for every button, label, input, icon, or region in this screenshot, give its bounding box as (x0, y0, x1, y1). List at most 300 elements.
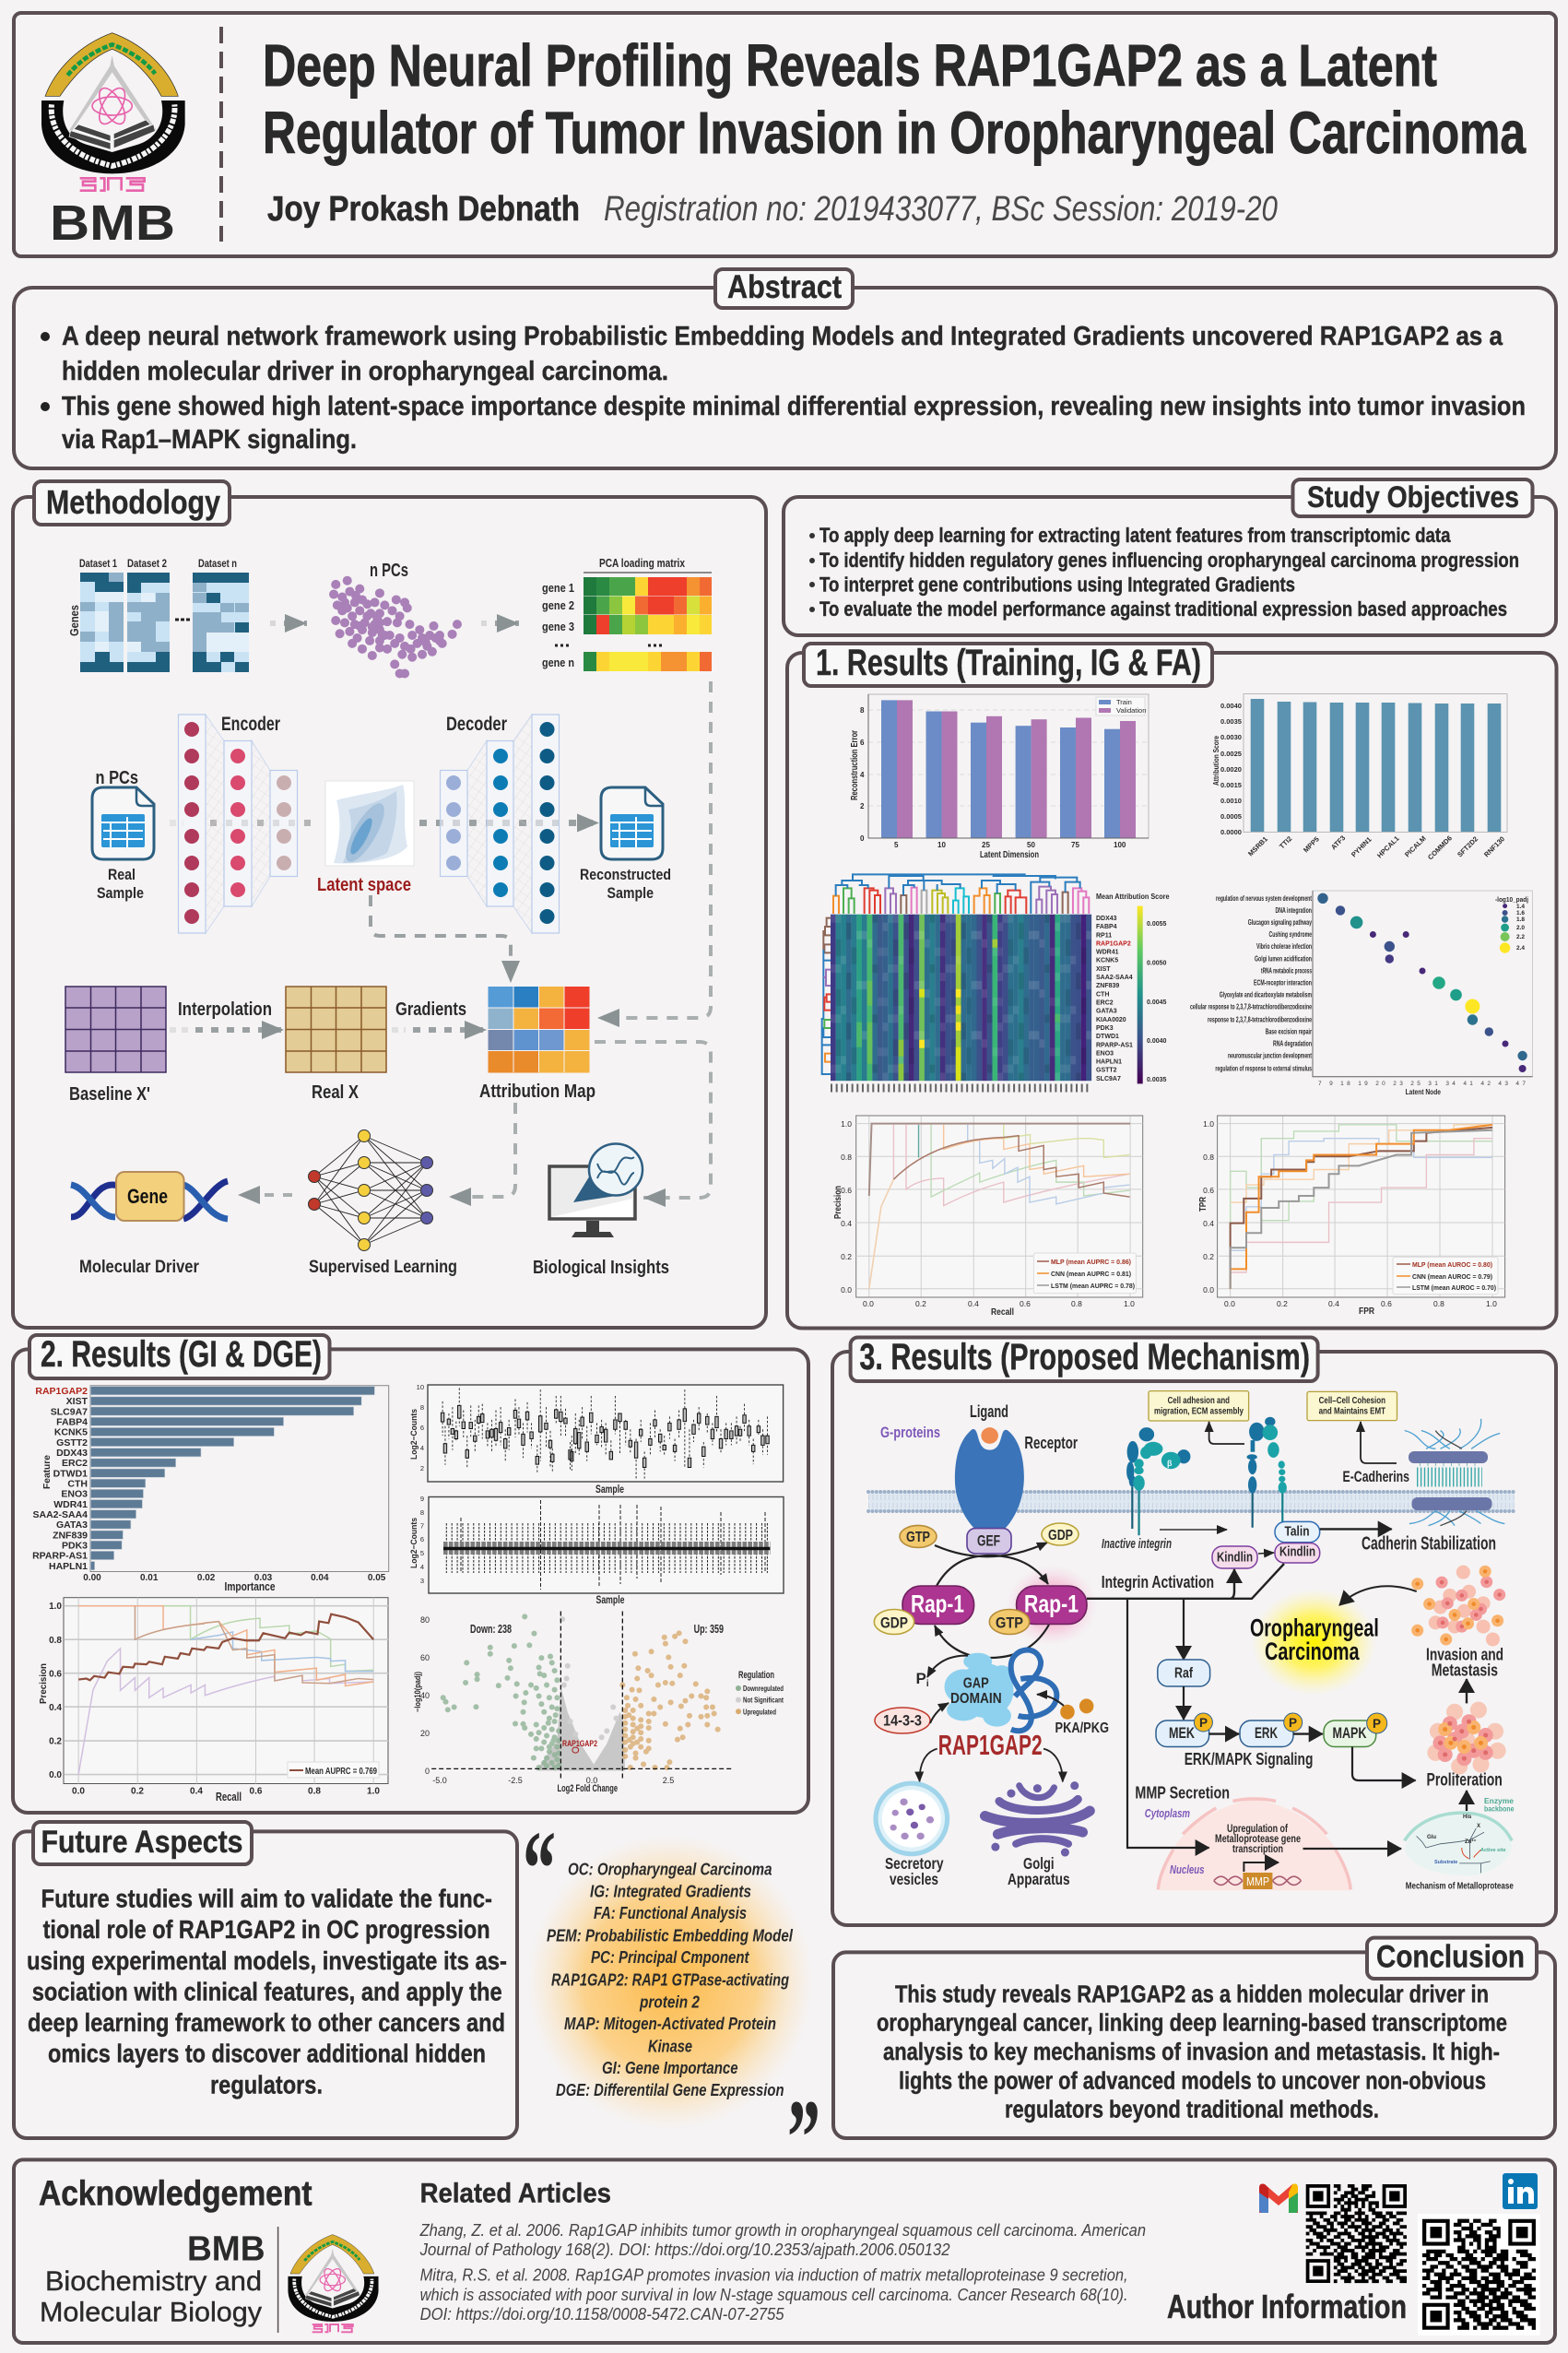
chart: reconstruction error bars: 6 (860, 739, 865, 747)
chart: enrichment dot plot: Golgi lumen acidification (1255, 955, 1312, 963)
icon: reconstructed sample document: Reconstructed (580, 866, 671, 883)
chart: reconstruction error bars: 100 (1114, 841, 1126, 849)
QR code: gmail (1306, 2184, 1407, 2283)
arrow: integrin activation step (1160, 1529, 1227, 1531)
arrow: loading matrix to attribution map (597, 681, 711, 1018)
text: objectives list: To interpret gene contributions using Integrated Gradients (819, 573, 1295, 597)
chart: clustered heatmap: RAP1GAP2 (1096, 940, 1131, 947)
chart: reconstruction error bars: 0 (860, 834, 865, 843)
heatmap: PCA loading matrix: gene 1 (542, 581, 574, 595)
icon: mechanism of metalloprotease: Substrate (1434, 1860, 1457, 1865)
icon: inactive integrin (1102, 1427, 1190, 1552)
chart: gene importance bars: ENO3 (61, 1489, 88, 1500)
chart: volcano plot: −log10(padj) (413, 1672, 422, 1712)
legend: PR models: CNN (mean AUPRC = 0.81) (1051, 1270, 1132, 1278)
icon: receptor with ligand and GEF: Receptor (1024, 1434, 1078, 1452)
diagram: ERK/MAPK signaling: Raf (1174, 1666, 1194, 1682)
chart: clustered heatmap: Mean Attribution Score (1096, 893, 1170, 901)
chart: enrichment dot plot (1190, 891, 1532, 1096)
icon: gene on DNA: Gene (127, 1185, 168, 1208)
chart: mean precision recall: Precision (38, 1663, 49, 1704)
chart: boxplot normalized counts: 3 (420, 1577, 424, 1585)
chart: mean precision recall: 0.0 (49, 1770, 62, 1780)
heatmap: PCA loading matrix: PCA loading matrix (599, 557, 685, 570)
text: abbreviations (547, 1860, 794, 2099)
icon: RAP1GAP2 GAP domain: 14-3-3 (883, 1713, 922, 1730)
author line: Joy Prokash Debnath (267, 190, 580, 229)
text: abstract bullets (41, 322, 1526, 455)
component: Talin and Kindlin: Kindlin (1217, 1549, 1253, 1565)
chart: ROC curves: 0.0 (1203, 1285, 1214, 1295)
panel: results 3 proposed mechanism (832, 1337, 1556, 1925)
chart: ROC curves: 1.0 (1203, 1119, 1214, 1129)
chart: clustered heatmap: SLC9A7 (1096, 1076, 1121, 1082)
diagram: Rap-1 GTP/GDP cycle: Rap-1 (1024, 1590, 1079, 1617)
icon: gmail (1259, 2183, 1298, 2213)
arrow: metastasis to carcinoma (1339, 1586, 1417, 1605)
icon: secretory vesicles: vesicles (890, 1870, 938, 1888)
heatmap: PCA loading matrix (542, 557, 712, 671)
legend: ROC models (1393, 1257, 1498, 1295)
chart: gene importance bars: 0.02 (197, 1573, 216, 1583)
heatmap: datasets (67, 557, 249, 672)
chart: boxplot raw counts: Log2−Counts (409, 1409, 419, 1460)
chart: clustered heatmap: KIAA0020 (1096, 1017, 1126, 1023)
text: future aspects body (27, 1885, 507, 2099)
chart: mean precision recall: 1.0 (367, 1787, 380, 1796)
panel: abstract (14, 269, 1556, 468)
icon: mechanism of metalloprotease (1405, 1796, 1515, 1892)
icon: invasion and metastasis cells: Invasion and (1426, 1645, 1503, 1664)
chart: attribution score bars: COMMD6 (1426, 834, 1454, 861)
chart: enrichment dot plot: 1.4 (1516, 904, 1525, 910)
chart: clustered heatmap: ERC2 (1096, 999, 1114, 1007)
legend: PR models: MLP (mean AUPRC = 0.86) (1051, 1258, 1132, 1266)
callout: oropharyngeal carcinoma: Carcinoma (1265, 1638, 1360, 1665)
diagram: autoencoder (170, 714, 599, 933)
chart: boxplot raw counts: 10 (417, 1383, 424, 1391)
text: related articles: DOI: https://doi.org/10.1158/0008-5472.CAN-07-2755 (420, 2305, 785, 2323)
chart: mean precision recall: 0.6 (250, 1787, 263, 1796)
icon: Golgi apparatus: Apparatus (1008, 1870, 1070, 1888)
heatmap: datasets: Dataset n (198, 557, 237, 570)
chart: gene importance bars: CTH (67, 1479, 88, 1490)
text: department name: Molecular Biology (40, 2298, 262, 2328)
chart: boxplot normalized counts: 9 (420, 1495, 424, 1503)
heatmap: attribution map (479, 987, 595, 1102)
legend: mean AUPRC: Mean AUPRC = 0.769 (305, 1766, 377, 1777)
panel: header (14, 13, 1556, 256)
chart: gene importance bars: KCNK5 (54, 1427, 88, 1438)
chart: clustered heatmap: 0.0050 (1147, 961, 1167, 967)
chart: reconstruction error bars: 5 (894, 841, 899, 849)
chart: volcano plot (413, 1612, 784, 1794)
text: objectives list (809, 524, 1519, 621)
chart: gene importance bars: 0.03 (254, 1573, 273, 1583)
chart: ROC curves: 0.0 (1224, 1299, 1235, 1308)
heading: results 2 (29, 1334, 330, 1378)
chart: precision recall curves: 0.4 (968, 1299, 979, 1308)
chart: boxplot raw counts: 6 (420, 1424, 424, 1432)
arrow: supervised learning to gene (238, 1193, 292, 1197)
icon: real sample document (92, 768, 154, 902)
text: future aspects body: using experimental models, investigate its as- (27, 1946, 507, 1975)
membrane (868, 1491, 1515, 1512)
icon: reconstructed sample document (580, 787, 671, 902)
chart: enrichment dot plot: regulation of response to external stimulus (1215, 1064, 1312, 1073)
chart: gene importance bars: XIST (66, 1396, 88, 1407)
arrow: datasets to PCs (270, 621, 307, 626)
heading: results 3: 3. Results (Proposed Mechanism) (859, 1337, 1310, 1378)
heatmap: datasets: Genes (67, 605, 81, 636)
chart: precision recall curves: 0.6 (1020, 1299, 1031, 1308)
text: cadherin stabilization: Cadherin Stabilization (1362, 1534, 1496, 1555)
chart: boxplot raw counts: Sample (595, 1483, 624, 1496)
legend: PR models (1033, 1253, 1136, 1294)
text: abbreviations: PEM: Probabilistic Embedding Model (547, 1925, 794, 1945)
chart: gene importance bars: 0.01 (140, 1573, 159, 1583)
chart: ROC curves: 0.6 (1203, 1186, 1214, 1195)
chart: gene importance bars: ERC2 (62, 1458, 88, 1469)
text: abstract bullets: hidden molecular driver in oropharyngeal carcinoma. (62, 357, 668, 386)
icon: real sample document: Real (108, 866, 136, 883)
callout: oropharyngeal carcinoma (1250, 1589, 1379, 1696)
chart: boxplot normalized counts: 8 (420, 1508, 424, 1517)
text: conclusion body: regulators beyond traditional methods. (1005, 2098, 1379, 2123)
arrow: gradients (392, 999, 487, 1030)
chart: mean precision recall: 0.4 (190, 1787, 203, 1796)
diagram: autoencoder: Decoder (446, 714, 507, 735)
chart: mean precision recall: 0.0 (72, 1787, 85, 1796)
chart: clustered heatmap: DTWD1 (1096, 1034, 1119, 1040)
chart: enrichment dot plot: neuromuscular junction development (1228, 1051, 1312, 1060)
chart: precision recall curves: 1.0 (841, 1119, 852, 1129)
panel: acknowledgement and references (14, 2159, 1555, 2343)
icon: receptor with ligand and GEF (880, 1402, 1078, 1554)
chart: mean precision recall: 0.2 (131, 1787, 144, 1796)
chart: gene importance bars: DDX43 (56, 1448, 88, 1459)
icon: receptor with ligand and GEF: GEF (977, 1532, 1000, 1549)
chart: attribution score bars: 0.0040 (1220, 702, 1242, 710)
chart: mean precision recall: 0.6 (49, 1669, 62, 1680)
icon: mechanism of metalloprotease: X (1477, 1824, 1480, 1829)
chart: boxplot normalized counts: 4 (420, 1563, 424, 1571)
chart: reconstruction error bars: 75 (1071, 841, 1079, 849)
arrow: Rap-1 integrin activation pathway: Integrin Activation (1102, 1573, 1214, 1591)
chart: ROC curves: 0.4 (1203, 1219, 1214, 1228)
text: abbreviations: RAP1GAP2: RAP1 GTPase-activating (551, 1969, 789, 1989)
icon: RAP1GAP2 GAP domain: GAP (963, 1676, 989, 1692)
icon: real sample document: n PCs (96, 768, 138, 788)
heading: conclusion: Conclusion (1376, 1940, 1525, 1975)
icon: RAP1GAP2 GAP domain: i (926, 1679, 929, 1689)
legend: ROC models: CNN (mean AUROC = 0.79) (1412, 1272, 1493, 1281)
chart: latent space density: Latent space (317, 875, 411, 895)
diagram: MMP secretion nucleus (1135, 1783, 1350, 1890)
text: abbreviations: MAP: Mitogen-Activated Protein (564, 2014, 776, 2033)
chart: attribution score bars: 0.0005 (1220, 812, 1242, 821)
chart: volcano plot: RAP1GAP2 (562, 1739, 597, 1749)
heading: future aspects: Future Aspects (41, 1825, 243, 1860)
chart: ROC curves: 0.6 (1381, 1299, 1392, 1308)
component: Talin and Kindlin: Talin (1285, 1524, 1309, 1540)
text: department name (40, 2229, 265, 2328)
icon: invasion and metastasis cells (1418, 1571, 1503, 1680)
chart: attribution score bars: 0.0010 (1220, 797, 1242, 805)
legend: regulation: Regulation (738, 1670, 774, 1681)
text: abstract bullets: via Rap1–MAPK signaling. (62, 425, 357, 455)
text: related articles (419, 2178, 1146, 2323)
chart: enrichment dot plot: Glyoxylate and dicarboxylate metabolism (1220, 990, 1312, 999)
text: department name: Biochemistry and (45, 2266, 262, 2297)
icon: active integrin (1246, 1417, 1287, 1528)
icon: receptor with ligand and GEF: Ligand (970, 1402, 1008, 1421)
chart: boxplot raw counts: 2 (420, 1464, 424, 1472)
chart: attribution score bars: 0.0020 (1220, 765, 1242, 774)
icon: E-cadherins: E-Cadherins (1342, 1468, 1409, 1485)
chart: enrichment dot plot: response to 2,3,7,8-tetrachlorodibenzodioxine (1208, 1016, 1312, 1023)
panel: results 1 (787, 643, 1556, 1328)
chart: clustered heatmap: RPARP-AS1 (1096, 1042, 1133, 1048)
chart: mean precision recall: 1.0 (49, 1602, 62, 1612)
text: future aspects body: sociation with clinical features, and apply the (32, 1977, 502, 2006)
chart: gene importance bars (32, 1386, 389, 1593)
text: abbreviations: FA: Functional Analysis (594, 1903, 747, 1922)
chart: mean precision recall: 0.8 (308, 1787, 321, 1796)
chart: clustered heatmap: 0.0045 (1147, 999, 1167, 1006)
callout: cell-cell cohesion: and Maintains EMT (1319, 1406, 1385, 1417)
chart: enrichment dot plot: Cushing syndrome (1268, 930, 1312, 939)
chart: volcano plot: 60 (420, 1653, 430, 1662)
chart: gene importance bars: 0.00 (83, 1573, 101, 1583)
chart: attribution score bars: ATF3 (1329, 834, 1347, 851)
chart: gene importance bars: SAA2-SAA4 (32, 1509, 88, 1520)
chart: enrichment dot plot: cellular response to 2,3,7,8-tetrachlorodibenzodioxine (1190, 1003, 1312, 1011)
diagram: ERK/MAPK signaling (1156, 1660, 1387, 1768)
text: abbreviations: GI: Gene Importance (602, 2058, 738, 2077)
chart: volcano plot: 80 (420, 1615, 430, 1625)
chart: gene importance bars: GATA3 (56, 1519, 88, 1531)
chart: attribution score bars: 0.0025 (1220, 750, 1242, 758)
arrow: latent space to attribution map (371, 895, 511, 983)
chart: mean precision recall (38, 1598, 388, 1803)
icon: mechanism of metalloprotease: Active site (1480, 1848, 1506, 1853)
chart: attribution score bars: PYHIN1 (1350, 835, 1373, 858)
text: conclusion body: lights the power of advanced models to uncover non-obvious (899, 2068, 1486, 2094)
icon: RAP1GAP2 GAP domain (875, 1650, 1109, 1781)
arrow: interpolation: Interpolation (178, 999, 272, 1020)
text: abbreviations: DGE: Differentilal Gene Expression (556, 2080, 784, 2099)
chart: reconstruction error bars: 25 (982, 841, 990, 849)
chart: boxplot raw counts: 8 (420, 1403, 424, 1412)
text: BMB: BMB (50, 195, 175, 251)
chart: reconstruction error bars: Validation (1116, 706, 1146, 715)
chart: reconstruction error bars: 4 (860, 771, 865, 779)
diagram: Rap-1 GTP/GDP cycle: GTP (906, 1530, 930, 1545)
chart: mean precision recall: 0.2 (49, 1737, 62, 1746)
chart: clustered heatmap: 0.0035 (1147, 1077, 1167, 1083)
icon: secretory vesicles: Secretory (885, 1854, 944, 1873)
panel: study objectives (784, 479, 1556, 635)
chart: attribution score bars: SFT2D2 (1456, 834, 1480, 858)
text: future aspects body: deep learning framework to other cancers and (28, 2008, 505, 2037)
chart: precision recall curves: Precision (833, 1186, 843, 1219)
chart: clustered heatmap: WDR41 (1096, 950, 1119, 956)
text: abbreviations: protein 2 (639, 1992, 701, 2011)
chart: boxplot normalized counts: 6 (420, 1535, 424, 1543)
icon: biological insights monitor: Biological Insights (533, 1258, 669, 1278)
icon: proliferation cell cluster (1435, 1710, 1498, 1767)
chart: clustered heatmap: SAA2-SAA4 (1096, 975, 1133, 981)
text: future aspects body: Future studies will aim to validate the func- (41, 1885, 492, 1913)
chart: gene importance bars: SLC9A7 (51, 1406, 88, 1417)
chart: volcano plot: Log2 Fold Change (557, 1783, 618, 1794)
chart: attribution score bars: 0.0030 (1220, 733, 1242, 741)
heading: methodology: Methodology (46, 483, 220, 521)
chart: boxplot normalized counts: 7 (420, 1521, 424, 1531)
chart: mean precision recall: 0.8 (49, 1636, 62, 1646)
chart: volcano plot: -5.0 (432, 1776, 447, 1785)
icon: inactive integrin: Inactive integrin (1102, 1537, 1172, 1552)
chart: enrichment dot plot: Glucagon signaling pathway (1248, 918, 1312, 927)
chart: enrichment dot plot: RNA degradation (1273, 1040, 1312, 1047)
diagram: Rap-1 GTP/GDP cycle (874, 1523, 1098, 1658)
legend: PR models: LSTM (mean AUPRC = 0.78) (1051, 1282, 1136, 1290)
heatmap: attribution map: Attribution Map (479, 1082, 595, 1102)
chart: reconstruction error bars: 8 (860, 706, 865, 715)
chart: volcano plot: 20 (420, 1729, 430, 1738)
text: future aspects body: regulators. (210, 2070, 323, 2099)
heatmap: PCA loading matrix: gene 2 (542, 598, 574, 612)
chart: volcano plot: -2.5 (508, 1776, 523, 1785)
icon: mechanism of metalloprotease: Mechanism of Metalloprotease (1406, 1881, 1514, 1892)
arrow: autoencoder flow (170, 820, 184, 826)
icon: closing quote: ” (787, 2077, 820, 2198)
text: conclusion body: This study reveals RAP1GAP2 as a hidden molecular driver in (895, 1981, 1489, 2007)
chart: mean precision recall: 0.4 (49, 1703, 62, 1713)
chart: reconstruction error bars: 2 (860, 802, 865, 810)
arrow: integrin to adhesion (1209, 1422, 1244, 1444)
heatmap: datasets: Dataset 1 (79, 557, 117, 570)
callout: cell-cell cohesion (1307, 1391, 1397, 1421)
chart: ROC curves: 0.2 (1203, 1252, 1214, 1261)
chart: clustered heatmap: 0.0040 (1147, 1038, 1167, 1045)
chart: ROC curves: FPR (1359, 1307, 1375, 1317)
author line: Registration no: 2019433077, BSc Session: 2019-20 (604, 190, 1278, 229)
component: Talin and Kindlin: Kindlin (1279, 1543, 1315, 1560)
chart: attribution score bars: RNF130 (1482, 834, 1506, 858)
text: future aspects body: tional role of RAP1GAP2 in OC progression (43, 1915, 490, 1944)
chart: precision recall curves: 0.4 (841, 1219, 852, 1228)
chart: volcano plot: 0.0 (586, 1776, 597, 1785)
chart: reconstruction error bars: 50 (1027, 841, 1035, 849)
diagram: ERK/MAPK signaling: MAPK (1333, 1725, 1367, 1742)
text: related articles: Journal of Pathology 168(2). DOI: https://doi.org/10.2353/ajpath.2006.050132 (419, 2241, 950, 2259)
chart: ROC curves: 0.2 (1277, 1299, 1288, 1308)
chart: precision recall curves: 0.8 (1071, 1299, 1082, 1308)
chart: clustered heatmap: PDK3 (1096, 1025, 1114, 1032)
arrow: Talin to cadherin stabilization (1320, 1528, 1392, 1531)
dendrogram: left (822, 918, 831, 1074)
icon: mechanism of metalloprotease: Zn²⁺ (1465, 1839, 1477, 1845)
grid: real X: Real X (312, 1082, 360, 1103)
arrow: Rap-1 to Raf (1183, 1599, 1185, 1660)
legend: mean AUPRC (288, 1762, 379, 1778)
chart: precision recall curves (833, 1116, 1143, 1318)
chart: enrichment dot plot: Base excision repair (1266, 1027, 1313, 1036)
diagram: MMP secretion nucleus: Metalloprotease gene (1215, 1832, 1301, 1845)
text: future aspects body: omics layers to discover additional hidden (48, 2040, 486, 2068)
text: abbreviations: PC: Principal Cmponent (591, 1947, 749, 1967)
chart: volcano plot: Down: 238 (470, 1622, 512, 1636)
icon: RAP1GAP2 GAP domain: DOMAIN (950, 1691, 1002, 1707)
diagram: MMP secretion nucleus: transcription (1232, 1842, 1283, 1855)
text: related articles: which is associated with poor survival in low N-stage squamous cell carcinoma. Cancer Research 68(10). (420, 2286, 1128, 2304)
diagram: ERK/MAPK signaling: MEK (1169, 1725, 1195, 1742)
chart: reconstruction error bars: 10 (937, 841, 946, 849)
chart: gene importance bars: GSTT2 (56, 1437, 88, 1448)
icon: biological insights monitor (533, 1143, 669, 1278)
icon: receptor with ligand and GEF: G-proteins (880, 1424, 940, 1441)
arrow: interpolation (170, 999, 284, 1030)
chart: attribution score bars: HPCAL1 (1375, 834, 1401, 859)
chart: enrichment dot plot: 1.8 (1516, 916, 1525, 923)
arrow: cadherin to cohesion (1361, 1422, 1397, 1463)
diagram: MMP secretion nucleus: Cytoplasm (1145, 1806, 1190, 1820)
chart: enrichment dot plot: Latent Node (1406, 1087, 1441, 1096)
icon: RAP1GAP2 GAP domain: RAP1GAP2 (938, 1729, 1043, 1761)
arrow: metalloprotease to proliferation (1466, 1791, 1468, 1811)
chart: reconstruction error bars: Reconstruction Error (850, 730, 860, 800)
chart: clustered heatmap: RP11 (1096, 932, 1112, 939)
logo: university crest (41, 33, 185, 191)
legend: regulation (736, 1670, 784, 1716)
chart: attribution score bars: MPP5 (1302, 835, 1321, 854)
chart: gene importance bars: ZNF839 (53, 1530, 88, 1541)
diagram: Rap-1 GTP/GDP cycle: GDP (1048, 1528, 1073, 1543)
chart: enrichment dot plot: 2.2 (1516, 934, 1525, 940)
chart: clustered heatmap (822, 874, 1170, 1088)
icon: mechanism of metalloprotease: His (1463, 1815, 1472, 1820)
chart: reconstruction error bars (850, 694, 1149, 860)
callout: oropharyngeal carcinoma: Oropharyngeal (1250, 1614, 1379, 1642)
chart: boxplot normalized counts: Sample (595, 1593, 625, 1606)
chart: boxplot normalized counts: Log2−Counts (409, 1518, 419, 1568)
diagram: ERK/MAPK signaling: P (1373, 1717, 1381, 1731)
heatmap: datasets: Dataset 2 (127, 557, 167, 570)
component: Talin and Kindlin (1212, 1521, 1320, 1568)
heading: abstract: Abstract (727, 269, 842, 305)
chart: reconstruction error bars: Train (1116, 698, 1132, 706)
diagram: ERK/MAPK signaling: P (1199, 1716, 1208, 1730)
chart: clustered heatmap: FABP4 (1096, 924, 1117, 930)
chart: precision recall curves: Recall (991, 1307, 1014, 1318)
chart: attribution score bars: PICALM (1403, 834, 1428, 858)
text: conclusion body (877, 1981, 1507, 2123)
icon: opening quote: “ (523, 1808, 556, 1929)
legend: regulation: Downregulated (743, 1684, 784, 1693)
text: related articles: Mitra, R.S. et al. 2008. Rap1GAP promotes invasion via induction of matrix metalloproteinase 9 secretion, (420, 2265, 1128, 2284)
grid: real X (286, 987, 386, 1103)
chart: attribution score bars: Attribution Score (1211, 736, 1220, 786)
callout: cell adhesion: migration, ECM assembly (1154, 1406, 1244, 1417)
icon: Golgi apparatus: Golgi (1023, 1854, 1055, 1873)
icon: E-cadherins (1342, 1419, 1504, 1526)
chart: boxplot normalized counts (409, 1495, 784, 1606)
chart: mean precision recall: Recall (216, 1791, 242, 1803)
scatter: n PCs: n PCs (370, 561, 408, 581)
chart: volcano plot: Up: 359 (694, 1622, 724, 1636)
